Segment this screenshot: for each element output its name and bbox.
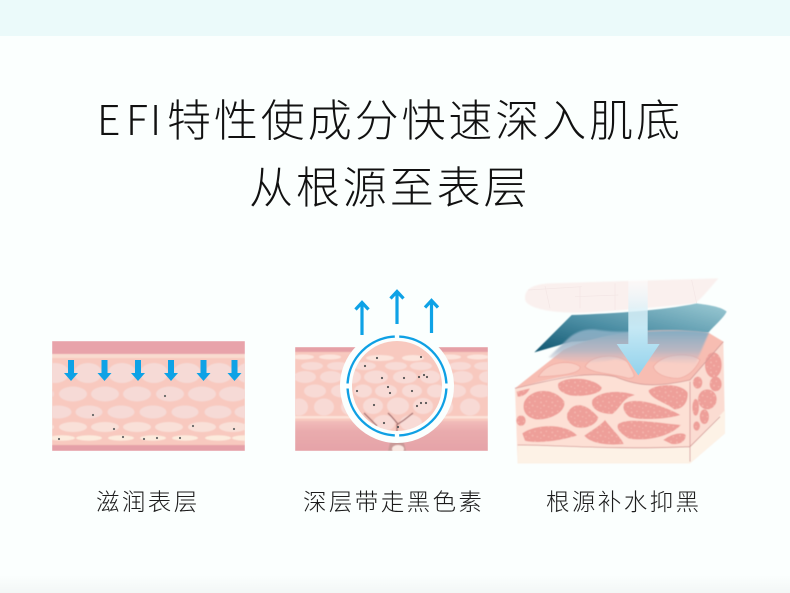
panel: skin block illustration [515,278,727,463]
fat cells [516,352,722,445]
block right face [690,342,725,463]
top surface cells [538,355,700,378]
teal serum layer [534,303,727,352]
title: 从根源至表层 [249,164,530,213]
title: I [150,87,161,147]
title [97,87,683,213]
skin cross-section [290,347,499,453]
skin cross-section [52,341,245,451]
label: deep layer: 深层带走黑色素 [303,489,484,515]
label: surface: 滋润表层 [96,489,200,515]
block outline [515,342,723,462]
mist over skin [548,329,709,365]
mask sheet [525,278,718,313]
block front face [515,375,690,463]
title: F [126,87,148,147]
title: 特性使成分快速深入肌底 [167,97,683,146]
panel: moisturize surface layer [52,341,245,451]
icon: down arrows [64,360,242,381]
melanin dots [58,395,235,440]
magnified skin [352,341,442,431]
bottom shading [0,575,790,593]
magnifier ring [346,335,448,437]
icon: up arrows [356,292,438,335]
blue ring [348,337,446,435]
title: E [97,87,120,147]
follicle [388,442,406,451]
panel: deep melanin removal [290,292,499,453]
skin block body [515,329,725,463]
skin block top [515,330,723,388]
top band [0,0,790,36]
arrow into skin [617,280,660,375]
melanin dots [356,356,428,428]
label: root: 根源补水抑黑 [546,489,701,515]
